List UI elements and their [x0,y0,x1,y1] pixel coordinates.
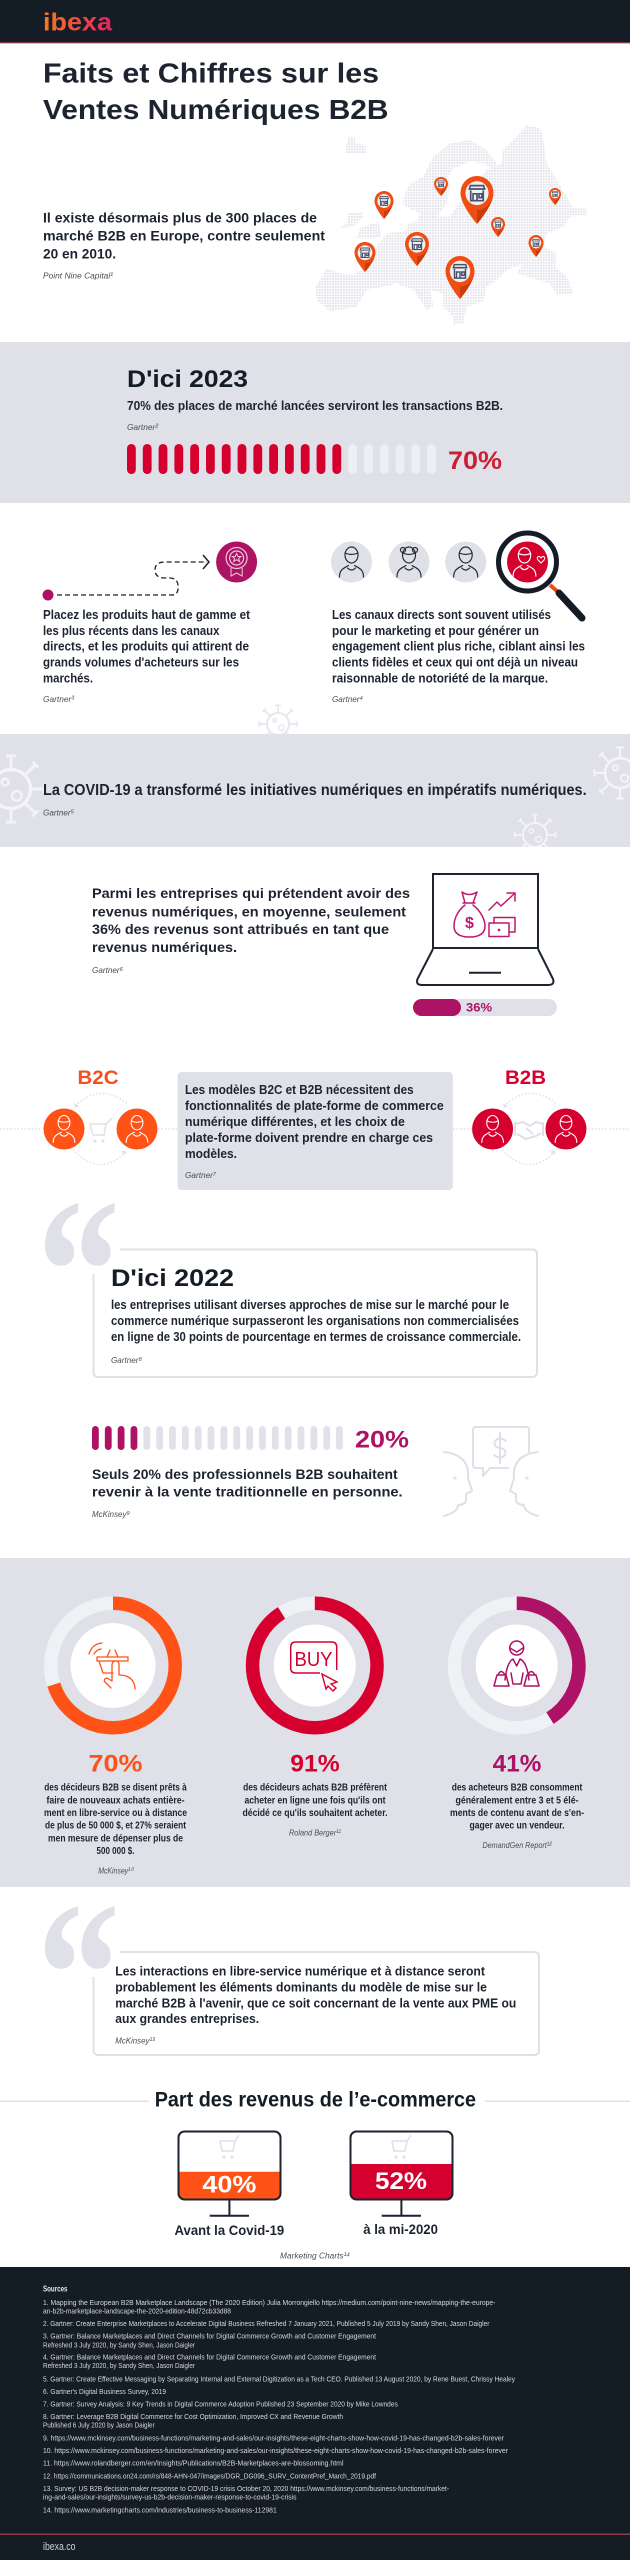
intro text block [43,210,325,281]
panel: by 2022 quote: Gartner⁸ [111,1355,142,1365]
panel: McKinsey quote [37,1860,539,2089]
stat: 41 percent: gager avec un vendeur. [470,1820,565,1832]
footer: sources: ibexa.co [43,2541,76,2553]
stat: 70 percent: faire de nouveaux achats entière- [46,1794,185,1806]
chart: monitor 40 percent: 40% [202,2172,256,2199]
panel: 20 percent: Seuls 20% des professionnels B2B souhaitent [92,1466,398,1482]
panel: three statistics [0,1558,630,1887]
panel: direct channels: clients fidèles et ceux qui ont déjà un niveau [332,655,578,670]
callout: B2C and B2B: numérique différentes, et les choix de [185,1114,405,1129]
stat: 91 percent: 91% [290,1751,340,1778]
panel: premium products: directs, et les produits qui attirent de [43,639,249,654]
source: Marketing Charts: Marketing Charts¹⁴ [280,2251,350,2261]
logo: ibexa [43,9,113,37]
stat: 70 percent: 500 000 $. [96,1845,135,1857]
stat: 41 percent: DemandGen Report¹² [482,1840,552,1850]
icon: magnifier on red customer [498,533,582,618]
footer: sources: 12. https://communications.on24.com/rs/848-AHN-047/images/DGR_DG096_SURV_ContentPref_March_2019.pdf [43,2471,377,2480]
stat: 70 percent [44,1751,187,1876]
stat: 41 percent: des acheteurs B2B consomment [452,1781,583,1793]
intro text block: 20 en 2010. [43,245,116,261]
icon: handshake [515,1122,543,1139]
text block: digital revenue: revenus numériques, en moyenne, seulement [92,904,406,920]
stat: 41 percent [450,1751,584,1850]
stat: 70 percent: ment en libre-service ou à distance [44,1807,187,1819]
panel: B2C [44,1068,158,1165]
bar chart: 20 percent [92,1426,409,1454]
title: Faits et Chiffres sur les [43,58,379,89]
panel: 20 percent [92,1426,538,1519]
intro text block: Point Nine Capital¹ [43,271,113,281]
chart: monitor 52 percent: à la mi-2020 [363,2221,438,2237]
title [43,58,388,125]
icon: quote mark: “ [37,1157,120,1386]
chart: monitor 40 percent: Avant la Covid-19 [175,2222,284,2238]
icon: laptop with money: $ [465,915,474,932]
stat: 70 percent: 70% [88,1751,142,1778]
icon: dashed path to badge [42,555,209,600]
panel: by 2023: 70% des places de marché lancées serviront les transactions B2B. [127,398,503,413]
icon: basket and hand [89,1643,135,1689]
panel: by 2022 quote: D'ici 2022 [111,1265,234,1292]
panel: McKinsey quote: marché B2B à l'avenir, que ce soit concernant de la vente aux PME ou [115,1995,516,2010]
donut: 91 percent [253,1603,377,1728]
progress bar: 36 percent: 36% [466,1001,492,1015]
panel: premium products: Gartner³ [43,694,75,704]
panel: by 2022 quote [37,1157,537,1386]
icon: virus above band [259,705,297,743]
stat: 70 percent: men mesure de dépenser plus de [48,1832,183,1844]
footer: sources [0,2267,630,2560]
progress bar: 36 percent [413,999,557,1016]
panel: by 2023: Gartner² [127,422,159,432]
chart: monitor 52 percent: 52% [375,2168,427,2195]
donut: 41 percent [454,1603,579,1728]
panel: covid band: Gartner⁵ [43,808,74,818]
panel: direct channels: Gartner⁴ [332,694,363,704]
icon: buy button and cursor: BUY [294,1649,332,1671]
footer: sources: 8. Gartner: Leverage B2B Digital Commerce for Cost Optimization, Improved CX and Revenue Growth [43,2412,343,2421]
panel: by 2022 quote: en ligne de 30 points de pourcentage en termes de croissance commerciale. [111,1330,521,1344]
icon: three customers [331,542,486,582]
bar chart: 70 percent [127,444,502,475]
footer: sources: ing-and-sales/our-insights/survey-us-b2b-decision-maker-response-to-covid-19-crisis [43,2492,297,2501]
panel: covid band: La COVID-19 a transformé les initiatives numériques en impératifs numériques. [43,782,587,799]
callout: B2C and B2B: modèles. [185,1146,237,1161]
panel: direct channels: engagement client plus riche, ciblant ainsi les [332,639,585,654]
callout: B2C and B2B: plate-forme doivent prendre en charge ces [185,1130,433,1145]
panel: premium products: les plus récents dans les canaux [43,623,220,638]
dotted Europe map with pins [310,120,595,330]
icon: laptop with money [417,874,553,985]
callout: B2C and B2B [178,1072,453,1190]
stat: 91 percent: acheter en ligne une fois qu'ils ont [244,1794,386,1806]
panel: B2B: B2B [505,1068,546,1089]
heading: e-commerce revenue share: Part des revenus de l’e-commerce [155,2089,476,2112]
footer: sources: 9. https://www.mckinsey.com/business-functions/marketing-and-sales/our-insights/these-eight-charts-show-how-covid-19-has-changed-b2b-sales-forever [43,2434,504,2443]
panel: direct channels: raisonnable de notoriété de la marque. [332,671,548,686]
footer: sources: 4. Gartner: Balance Marketplaces and Direct Channels for Digital Commerce Growth and Customer Engagement [43,2353,377,2362]
bar chart: 20 percent: 20% [355,1427,409,1454]
panel: direct channels: pour le marketing et pour générer un [332,623,539,638]
stat: 70 percent: McKinsey¹⁰ [98,1866,134,1876]
panel: premium products: Placez les produits haut de gamme et [43,607,251,622]
panel: B2C: B2C [78,1068,119,1089]
text block: digital revenue: Parmi les entreprises qui prétendent avoir des [92,885,410,901]
panel: by 2023 [0,342,630,503]
panel: direct channels [331,533,585,704]
stat: 41 percent: ments de contenu avant de s'en- [450,1807,584,1819]
panel: 20 percent: revenir à la vente traditionnelle en personne. [92,1484,403,1500]
footer: sources: 11. https://www.rolandberger.com/en/Insights/Publications/B2B-Marketplaces-are-blossoming.html [43,2459,344,2468]
icons: white viruses [0,748,630,855]
panel: McKinsey quote: probablement les éléments dominants du modèle de mise sur le [115,1980,487,1995]
icon: shopper with bags [494,1641,539,1686]
icon: quote mark: “ [37,1860,120,2089]
stat: 91 percent: décidé ce qu'ils souhaitent acheter. [242,1807,388,1819]
panel: premium products: marchés. [43,671,93,686]
header bar [0,0,630,44]
footer: sources: 7. Gartner: Survey Analysis: 9 Key Trends in Digital Commerce Adoption Published 23 September 2020 by Mike Lowndes [43,2399,398,2408]
callout: B2C and B2B: fonctionnalités de plate-forme de commerce [185,1098,444,1113]
panel: by 2022 quote: commerce numérique surpasseront les organisations non commercialisées [111,1314,519,1328]
footer: sources: an-b2b-marketplace-landscape-the-2020-edition-48d72cb33d88 [43,2306,231,2315]
panel: McKinsey quote: aux grandes entreprises. [115,2011,259,2026]
panel: B2B [472,1068,586,1165]
stat: 91 percent: Roland Berger¹¹ [289,1828,341,1838]
footer: sources: 5. Gartner: Create Effective Messaging by Separating Internal and External Digitization as a Tech CEO. Published 13 August 2020, by Rene Buest, Chrissy Healey [43,2374,515,2383]
callout: B2C and B2B: Les modèles B2C et B2B nécessitent des [185,1082,414,1097]
footer: sources: Published 6 July 2020 by Jason Daigler [43,2420,155,2429]
panel: by 2023: D'ici 2023 [127,366,248,393]
footer: sources: 3. Gartner: Balance Marketplaces and Direct Channels for Digital Commerce Growth and Customer Engagement [43,2332,377,2341]
footer: sources: Sources [43,2285,68,2294]
panel: 20 percent: McKinsey⁹ [92,1509,130,1519]
icon: two faces with dollar bubble [444,1427,538,1516]
callout: B2C and B2B: Gartner⁷ [185,1170,217,1180]
text block: digital revenue [92,885,410,975]
panel: McKinsey quote: McKinsey¹³ [115,2035,156,2045]
footer: sources: 2. Gartner: Create Enterprise Marketplaces to Accelerate Digital Business Refreshed 7 January 2021, Published 5 July 2019 by Sandy Shen, Jason Daigler [43,2319,490,2328]
panel: direct channels: Les canaux directs sont souvent utilisés [332,607,551,622]
text block: digital revenue: Gartner⁶ [92,965,123,975]
intro text block: marché B2B en Europe, contre seulement [43,228,325,244]
icon: cart [220,2135,239,2158]
donut: 70 percent [51,1603,175,1728]
panel: premium products: grands volumes d'acheteurs sur les [43,655,239,670]
stat: 41 percent: généralement entre 3 et 5 élé- [456,1794,579,1806]
bar chart: 70 percent: 70% [448,447,502,475]
text block: digital revenue: revenus numériques. [92,939,237,955]
title: Ventes Numériques B2B [43,94,388,125]
footer: sources: Refreshed 3 July 2020, by Sandy Shen, Jason Daigler [43,2340,195,2349]
icon: cart [392,2135,411,2158]
panel: McKinsey quote: Les interactions en libre-service numérique et à distance seront [115,1964,486,1979]
stat: 41 percent: 41% [493,1751,541,1778]
stat: 70 percent: de plus de 50 000 $, et 27% seraient [45,1820,186,1832]
footer: sources: 13. Survey: US B2B decision-maker response to COVID-19 crisis October 20, 2020 https://www.mckinsey.com/business-functions/market- [43,2484,449,2493]
icon: award badge [216,542,257,582]
stat: 70 percent: des décideurs B2B se disent prêts à [44,1781,187,1793]
footer: sources: 1. Mapping the European B2B Marketplace Landscape (The 2020 Edition) Julia Morrongiello https://medium.com/point-nine-news/mapping-the-europe- [43,2298,496,2307]
panel: premium products [42,542,257,704]
text block: digital revenue: 36% des revenus sont attribués en tant que [92,921,389,937]
footer: sources: 6. Gartner's Digital Business Survey, 2019 [43,2387,166,2396]
chart: monitor 40 percent [175,2132,284,2238]
intro text block: Il existe désormais plus de 300 places de [43,210,317,226]
footer: sources: Refreshed 3 July 2020, by Sandy Shen, Jason Daigler [43,2361,195,2370]
icon: cart [90,1118,112,1142]
panel: by 2022 quote: les entreprises utilisant diverses approches de mise sur le marché pour le [111,1298,509,1312]
dotted connecting line [0,1128,630,1130]
stat: 91 percent [242,1751,388,1838]
footer: sources: 10. https://www.mckinsey.com/business-functions/marketing-and-sales/our-insights/these-eight-charts-show-how-covid-19-has-changed-b2b-sales-forever [43,2446,508,2455]
stat: 91 percent: des décideurs achats B2B préfèrent [243,1781,387,1793]
footer: sources: 14. https://www.marketingcharts.com/industries/business-to-business-112981 [43,2505,277,2514]
chart: monitor 52 percent [350,2132,452,2237]
panel: covid band [0,734,630,855]
